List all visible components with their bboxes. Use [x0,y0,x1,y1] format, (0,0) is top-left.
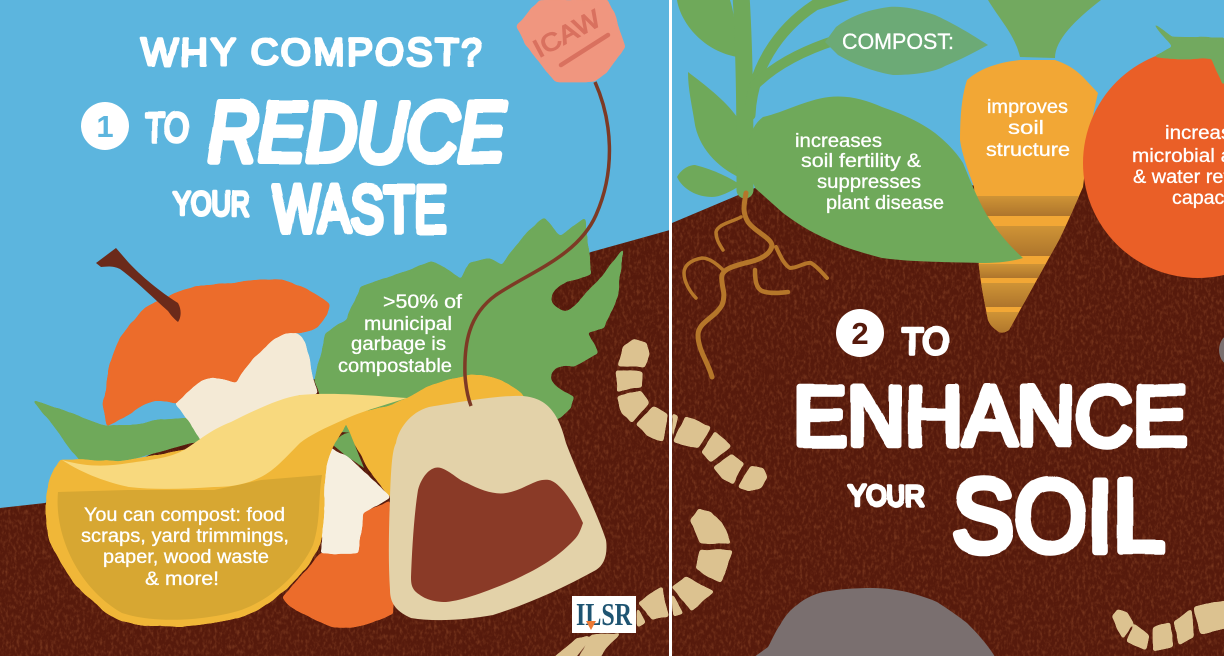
tomato text [1132,123,1224,209]
carrot text: structure [986,140,1070,161]
worm upper [616,339,668,441]
statistic text: garbage is [351,334,446,355]
peel text: & more! [145,569,219,590]
leaf text: increases [795,131,882,152]
heading: to enhance your soil: SOIL [952,459,1165,573]
soil ground [672,140,1224,656]
grey rock [750,588,997,656]
leaf text: suppresses [817,172,921,193]
carrot text: soil [1008,118,1044,139]
leaf text [795,131,944,214]
peel text [81,505,289,590]
orange peel back piece [346,374,524,496]
logo: ILSR: ILSR [576,596,633,632]
compost leaf with label [825,7,988,75]
apple core flesh [176,333,317,440]
heading: why compost: WHY COMPOST? [142,32,482,74]
green leaf with statistic background [315,218,624,450]
panel: reduce your waste [0,0,670,656]
soil ground [0,220,670,656]
grey rock sliver [1219,334,1224,366]
plant roots [684,193,827,377]
peel bowl with text [46,394,407,626]
lower apple piece orange [283,500,394,628]
statistic text: municipal [364,314,452,335]
plant leaves [677,0,736,197]
tag string [465,82,609,406]
panel: enhance your soil [672,0,1224,656]
apple stem [96,248,181,322]
carrot [960,60,1100,334]
compost bag [389,396,607,620]
worm upper, right part [672,413,767,491]
number badge 2: 2 [851,316,869,351]
number badge 1 [81,102,129,150]
worm lower, right part [672,508,732,617]
peel text: scraps, yard trimmings, [81,526,289,547]
price tag with ICAW label [517,0,625,82]
green leaf, left [34,400,201,463]
statistic text: >50% of [383,292,463,313]
plant stems [741,0,847,190]
tomato [1083,22,1224,278]
worm lower [552,587,668,656]
number badge 1: 1 [96,109,114,144]
tomato stem [1155,25,1224,84]
compost leaf with label: COMPOST: [842,29,954,54]
peel text: paper, wood waste [103,547,269,568]
carrot text [986,97,1070,161]
worm bottom right [1112,601,1224,651]
apple skin [103,280,330,427]
large green leaf with text [748,97,1023,263]
sky background [0,0,669,508]
leaf text: soil fertility & [801,151,921,172]
leaf text: plant disease [826,193,944,214]
heading: to reduce your waste: REDUCE [208,85,506,179]
green window behind peel [333,433,364,468]
heading: to reduce your waste [144,98,509,236]
statistic text: compostable [338,356,452,377]
price tag with ICAW label: ICAW [529,5,606,63]
carrot leaves [988,0,1101,58]
carrot text: improves [987,97,1068,118]
sky background [672,0,1224,223]
lower apple flesh [321,445,390,553]
heading: to reduce your waste: WASTE [273,172,447,246]
statistic text [338,292,463,377]
heading: to enhance your soil [793,321,1187,573]
heading: to enhance your soil: ENHANCE [793,369,1187,463]
heading: to reduce your waste: YOUR [173,185,250,222]
heading: to reduce your waste: TO [145,104,190,151]
number badge 2 [836,309,884,357]
peel text: You can compost: food [84,505,285,526]
heading: to enhance your soil: TO [902,321,949,362]
heading: to enhance your soil: YOUR [848,481,925,513]
